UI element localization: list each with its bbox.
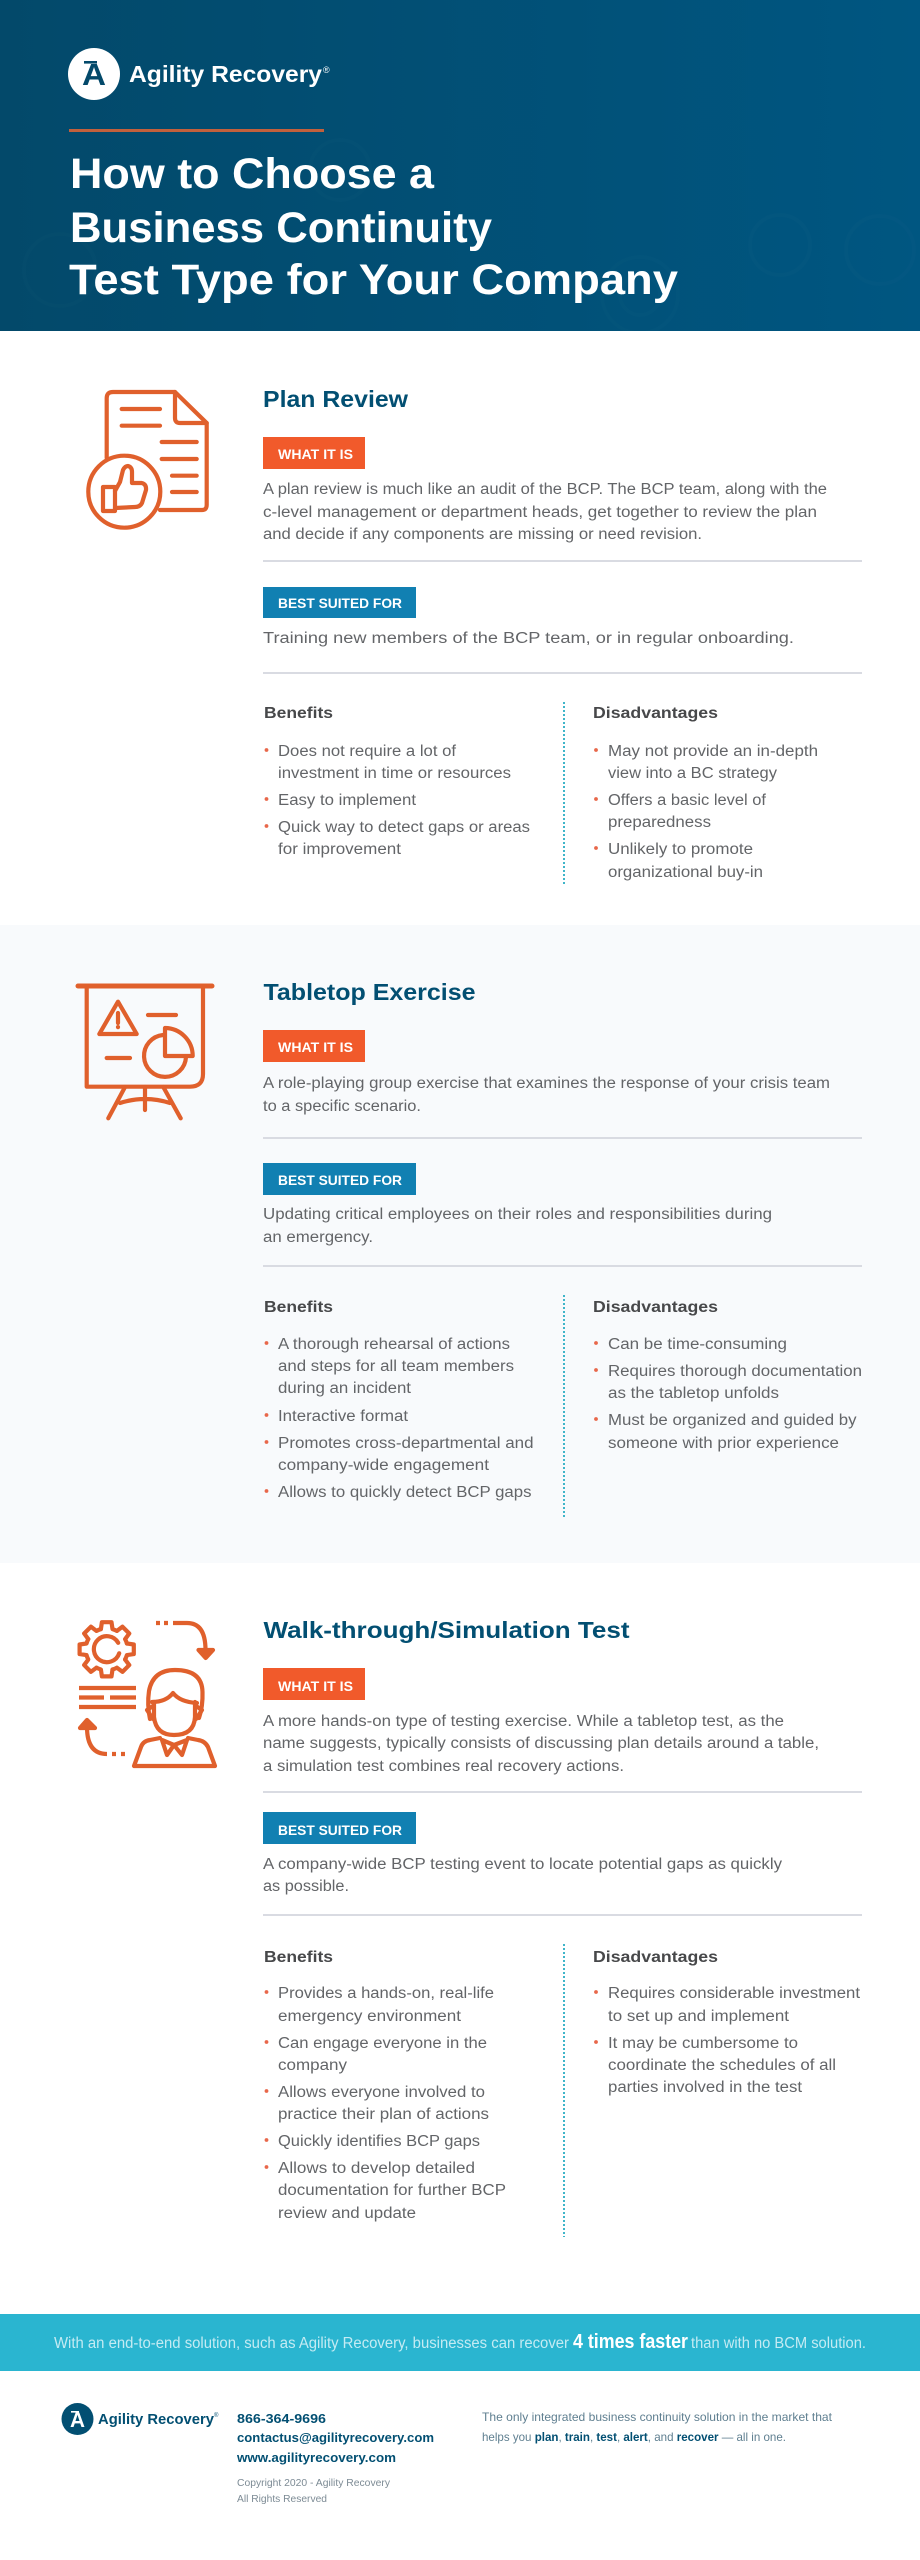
text: best suited for: Training new members of the BCP team, or in regular onboarding. bbox=[263, 630, 794, 647]
heading: Walk-through/Simulation Test: Walk-through/Simulation Test bbox=[264, 1617, 630, 1643]
benefits list: Allows everyone involved to bbox=[278, 2084, 485, 2101]
disadvantages list bbox=[593, 705, 818, 881]
heading: Plan Review: Plan Review bbox=[263, 386, 408, 412]
icon: presentation board bbox=[78, 986, 212, 1118]
logo: Agility Recovery navy: Agility Recovery bbox=[98, 2411, 215, 2428]
callout banner: 4 times faster bbox=[573, 2331, 688, 2353]
disadvantages list: Offers a basic level of bbox=[608, 792, 767, 809]
title: How to Choose a bbox=[70, 150, 435, 198]
benefits list: Provides a hands-on, real-life bbox=[278, 1985, 494, 2002]
copyright: All Rights Reserved bbox=[237, 2493, 327, 2505]
benefits list: Benefits bbox=[264, 1949, 333, 1966]
copyright: Copyright 2020 - Agility Recovery bbox=[237, 2477, 391, 2489]
text: best suited for bbox=[263, 1856, 782, 1895]
text: what it is bbox=[263, 1713, 819, 1775]
disadvantages list: Disadvantages bbox=[593, 1949, 718, 1966]
callout banner: than with no BCM solution. bbox=[691, 2335, 866, 2352]
benefits list: Allows to develop detailed bbox=[278, 2160, 475, 2177]
disadvantages list bbox=[593, 1949, 861, 2096]
disadvantages list: Must be organized and guided by bbox=[608, 1412, 857, 1429]
text: what it is: c-level management or department heads, get together to review the plan bbox=[263, 504, 817, 521]
heading: Tabletop Exercise: Tabletop Exercise bbox=[264, 979, 476, 1005]
logo: Agility Recovery white bbox=[68, 48, 330, 100]
benefits list: Can engage everyone in the bbox=[278, 2035, 487, 2052]
callout banner bbox=[0, 2314, 920, 2371]
disadvantages list: Requires thorough documentation bbox=[608, 1363, 862, 1380]
logo: Agility Recovery navy bbox=[62, 2403, 219, 2435]
tagline bbox=[482, 2410, 833, 2444]
benefits list: emergency environment bbox=[278, 2008, 462, 2025]
contact details: contactus@agilityrecovery.com bbox=[237, 2430, 434, 2445]
text: what it is: a simulation test combines real recovery actions. bbox=[263, 1758, 624, 1775]
benefits list: for improvement bbox=[278, 841, 402, 858]
disadvantages list: someone with prior experience bbox=[608, 1435, 839, 1452]
benefits list: Quickly identifies BCP gaps bbox=[278, 2133, 480, 2150]
benefits list: Interactive format bbox=[278, 1408, 409, 1425]
badge: what it is: WHAT IT IS bbox=[278, 1039, 353, 1055]
disadvantages list: Can be time-consuming bbox=[608, 1336, 787, 1353]
logo: Agility Recovery white: A bbox=[82, 57, 106, 92]
callout banner: With an end-to-end solution, such as Agility Recovery, businesses can recover bbox=[54, 2335, 569, 2352]
panel: Plan Review bbox=[88, 386, 862, 885]
badge: what it is: WHAT IT IS bbox=[278, 446, 353, 462]
disadvantages list: coordinate the schedules of all bbox=[608, 2057, 836, 2074]
text: what it is: to a specific scenario. bbox=[263, 1098, 421, 1115]
disadvantages list: as the tabletop unfolds bbox=[608, 1385, 779, 1402]
panel: Walk-through/Simulation Test bbox=[79, 1617, 862, 2237]
tagline: helps you plan, train, test, alert, and recover — all in one. bbox=[482, 2430, 786, 2444]
benefits list: and steps for all team members bbox=[278, 1358, 514, 1375]
text: what it is: and decide if any components are missing or need revision. bbox=[263, 526, 702, 543]
benefits list: Benefits bbox=[264, 705, 333, 722]
disadvantages list: Unlikely to promote bbox=[608, 841, 753, 858]
benefits list: Does not require a lot of bbox=[278, 743, 457, 760]
badge: best suited for bbox=[263, 587, 416, 618]
text: what it is: name suggests, typically consists of discussing plan details around a table, bbox=[263, 1735, 819, 1752]
benefits list bbox=[264, 1299, 534, 1501]
benefits list: Promotes cross-departmental and bbox=[278, 1435, 534, 1452]
text: what it is: A more hands-on type of testing exercise. While a tabletop test, as the bbox=[263, 1713, 784, 1730]
text: best suited for bbox=[263, 1206, 772, 1246]
badge: what it is: WHAT IT IS bbox=[278, 1678, 353, 1694]
benefits list: during an incident bbox=[278, 1380, 412, 1397]
contact details bbox=[236, 2411, 434, 2465]
benefits list: Benefits bbox=[264, 1299, 333, 1316]
benefits list bbox=[264, 1949, 506, 2222]
disadvantages list bbox=[593, 1299, 862, 1452]
icon: document with thumbs up bbox=[88, 392, 207, 528]
title: Business Continuity bbox=[70, 204, 492, 252]
badge: best suited for: BEST SUITED FOR bbox=[278, 1172, 402, 1188]
benefits list: Easy to implement bbox=[278, 792, 417, 809]
logo: Agility Recovery navy: A bbox=[70, 2409, 85, 2432]
contact details: 866-364-9696 bbox=[237, 2411, 326, 2426]
benefits list bbox=[264, 705, 530, 858]
disadvantages list: May not provide an in-depth bbox=[608, 743, 818, 760]
badge: what it is bbox=[263, 1668, 365, 1700]
benefits list: practice their plan of actions bbox=[278, 2106, 489, 2123]
tagline: The only integrated business continuity solution in the market that bbox=[482, 2410, 833, 2424]
benefits list: investment in time or resources bbox=[278, 765, 511, 782]
benefits list: documentation for further BCP bbox=[278, 2182, 506, 2199]
benefits list: Quick way to detect gaps or areas bbox=[278, 819, 530, 836]
benefits list: Allows to quickly detect BCP gaps bbox=[278, 1484, 532, 1501]
disadvantages list: preparedness bbox=[608, 814, 711, 831]
logo: Agility Recovery navy: ® bbox=[214, 2412, 219, 2419]
text: what it is bbox=[263, 481, 827, 543]
disadvantages list: It may be cumbersome to bbox=[608, 2035, 798, 2052]
header banner bbox=[0, 0, 920, 333]
badge: best suited for: BEST SUITED FOR bbox=[278, 1822, 402, 1838]
title: Test Type for Your Company bbox=[69, 256, 678, 304]
logo: Agility Recovery white: Agility Recovery bbox=[129, 61, 322, 87]
text: best suited for: as possible. bbox=[263, 1878, 349, 1895]
icon: gear, person and cycle arrows bbox=[79, 1622, 215, 1766]
badge: best suited for bbox=[263, 1163, 416, 1195]
panel: Tabletop Exercise bbox=[0, 925, 920, 1563]
disadvantages list: view into a BC strategy bbox=[608, 765, 777, 782]
badge: what it is bbox=[263, 1030, 365, 1062]
text: what it is bbox=[263, 1075, 830, 1115]
benefits list: company-wide engagement bbox=[278, 1457, 490, 1474]
text: what it is: A role-playing group exercise that examines the response of your crisis team bbox=[263, 1075, 830, 1092]
badge: what it is bbox=[263, 437, 365, 469]
disadvantages list: Disadvantages bbox=[593, 1299, 718, 1316]
disadvantages list: to set up and implement bbox=[608, 2008, 790, 2025]
badge: best suited for: BEST SUITED FOR bbox=[278, 595, 402, 611]
copyright bbox=[237, 2477, 391, 2505]
text: what it is: A plan review is much like an audit of the BCP. The BCP team, along with the bbox=[263, 481, 827, 498]
disadvantages list: organizational buy-in bbox=[608, 864, 763, 881]
disadvantages list: Requires considerable investment bbox=[608, 1985, 861, 2002]
benefits list: company bbox=[278, 2057, 347, 2074]
footer bbox=[62, 2403, 833, 2505]
title bbox=[69, 150, 678, 304]
logo: Agility Recovery white: ® bbox=[323, 65, 330, 75]
title accent line bbox=[69, 129, 324, 132]
benefits list: A thorough rehearsal of actions bbox=[278, 1336, 510, 1353]
benefits list: review and update bbox=[278, 2205, 416, 2222]
disadvantages list: parties involved in the test bbox=[608, 2079, 803, 2096]
text: best suited for: Updating critical employees on their roles and responsibilities during bbox=[263, 1206, 772, 1223]
text: best suited for: an emergency. bbox=[263, 1229, 373, 1246]
disadvantages list: Disadvantages bbox=[593, 705, 718, 722]
badge: best suited for bbox=[263, 1812, 416, 1844]
contact details: www.agilityrecovery.com bbox=[236, 2450, 396, 2465]
text: best suited for: A company-wide BCP testing event to locate potential gaps as quickly bbox=[263, 1856, 782, 1873]
